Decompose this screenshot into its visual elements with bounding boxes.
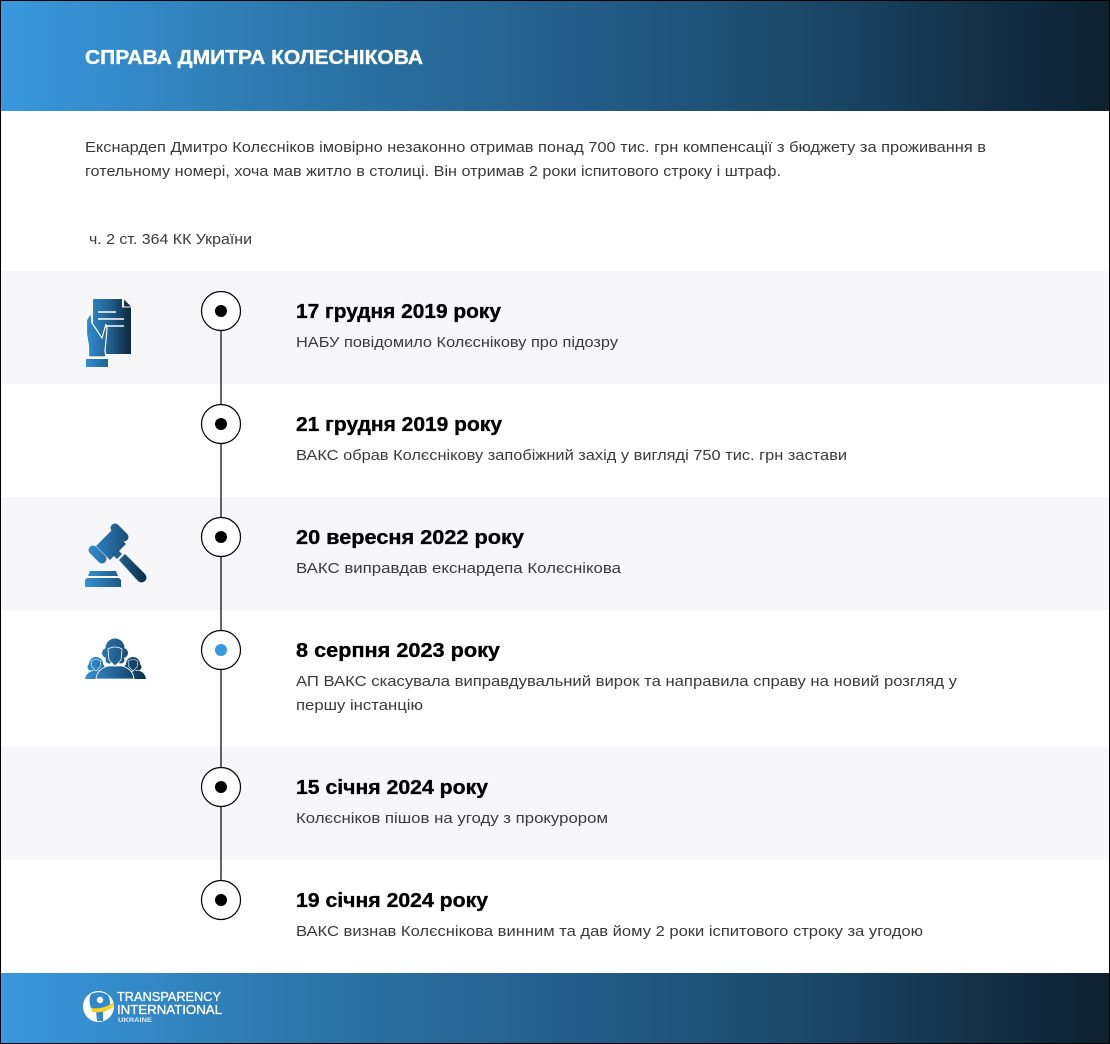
- description: ВАКС визнав Колєснікова винним та дав йому 2 роки іспитового строку за угодою: [296, 923, 923, 940]
- date: 20 вересня 2022 року: [296, 526, 525, 549]
- row background bands: [1, 271, 1109, 860]
- marker: [202, 768, 240, 806]
- marker: [202, 404, 240, 444]
- event 4: [202, 630, 958, 714]
- date: 21 грудня 2019 року: [296, 413, 503, 436]
- logo: Transparency International Ukraine: [83, 989, 222, 1024]
- marker: [202, 518, 240, 556]
- logo wordmark: [117, 989, 222, 1024]
- icon: group of judges: [85, 638, 146, 679]
- logo emblem: [83, 991, 114, 1022]
- description: [296, 673, 958, 714]
- description: НАБУ повідомило Колєснікову про підозру: [296, 334, 619, 351]
- logo wordmark: UKRAINE: [118, 1017, 153, 1024]
- footer banner: [1, 973, 1109, 1043]
- header banner: [1, 1, 1109, 111]
- event 3: [202, 518, 622, 577]
- description: АП ВАКС скасувала виправдувальний вирок та направила справу на новий розгляд у: [296, 673, 958, 690]
- icon: document in hand: [86, 299, 131, 367]
- description: першу інстанцію: [296, 697, 423, 714]
- event 1: [202, 292, 619, 351]
- logo wordmark: INTERNATIONAL: [117, 1002, 222, 1017]
- marker: [202, 880, 240, 920]
- intro text: готельному номері, хоча мав житло в столиці. Він отримав 2 роки іспитового строку і штраф.: [85, 163, 781, 180]
- date: 15 січня 2024 року: [296, 776, 489, 799]
- title: СПРАВА ДМИТРА КОЛЕСНІКОВА: [85, 47, 423, 69]
- event 5: [202, 768, 608, 827]
- logo wordmark: TRANSPARENCY: [117, 989, 221, 1004]
- date: 17 грудня 2019 року: [296, 300, 502, 323]
- intro text: Екснардеп Дмитро Колєсніков імовірно незаконно отримав понад 700 тис. грн компенсації з бюджету за проживання в: [85, 139, 986, 156]
- intro text: [85, 139, 986, 180]
- timeline line: [220, 311, 222, 900]
- description: ВАКС виправдав екснардепа Колєснікова: [296, 560, 622, 577]
- description: ВАКС обрав Колєснікову запобіжний захід у вигляді 750 тис. грн застави: [296, 447, 847, 464]
- event 2: [202, 404, 847, 464]
- marker: [202, 630, 240, 670]
- date: 19 січня 2024 року: [296, 889, 489, 912]
- event 6: [202, 880, 923, 940]
- icon: gavel: [85, 528, 146, 587]
- legal article reference: ч. 2 ст. 364 КК України: [89, 231, 252, 248]
- marker: [202, 292, 240, 330]
- description: Колєсніков пішов на угоду з прокурором: [296, 810, 608, 827]
- date: 8 серпня 2023 року: [296, 639, 501, 662]
